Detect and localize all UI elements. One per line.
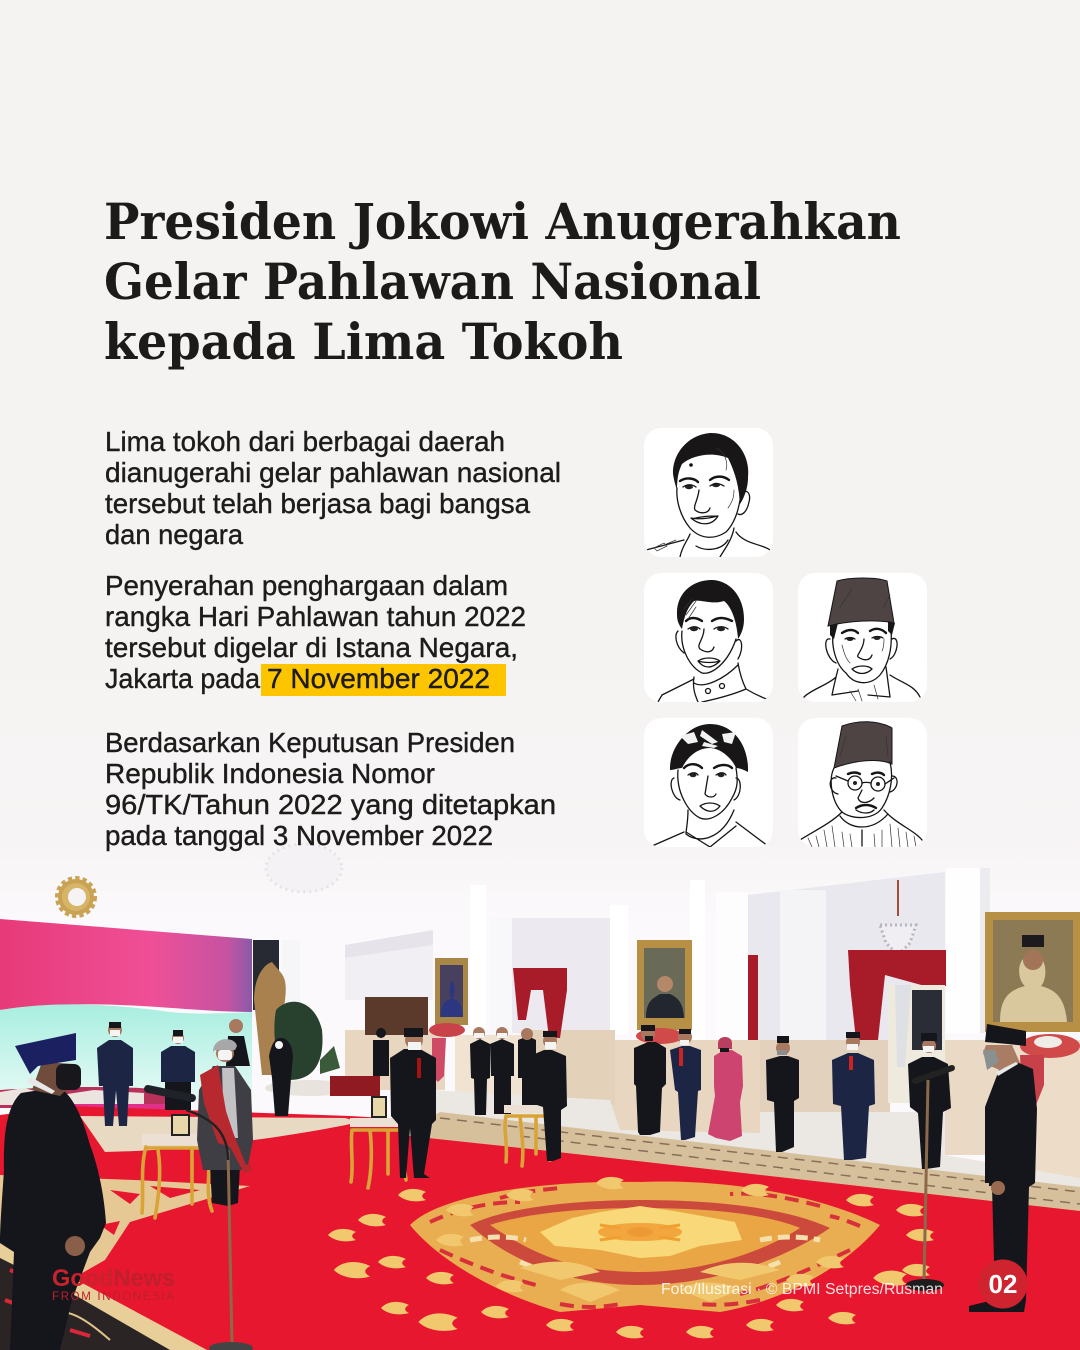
minister xyxy=(670,1029,701,1140)
window xyxy=(888,985,945,1103)
official in foreground right xyxy=(969,1024,1037,1312)
microphone stand left xyxy=(148,1089,253,1350)
recipient: man right xyxy=(530,1031,567,1161)
title: kepada Lima Tokoh xyxy=(104,312,623,371)
page number badge xyxy=(978,1260,1028,1308)
paragraph 1: dianugerahi gelar pahlawan nasional xyxy=(105,457,561,488)
wainscot marble base xyxy=(345,1030,1080,1180)
ornament: gold sun xyxy=(58,879,94,915)
portrait 5 xyxy=(798,718,927,847)
carpet xyxy=(0,1106,1080,1350)
table center xyxy=(350,1097,408,1188)
photo credit: Foto/Ilustrasi · © BPMI Setpres/Rusman xyxy=(661,1281,943,1298)
paragraph 3: Republik Indonesia Nomor xyxy=(105,758,435,789)
curtains xyxy=(513,950,946,1040)
recipient: woman in red sash xyxy=(197,1039,253,1206)
guest in black hijab xyxy=(269,1038,293,1116)
portrait 1 xyxy=(644,428,773,557)
wooden panel xyxy=(365,997,428,1035)
LED screen xyxy=(0,919,252,1118)
back row left xyxy=(470,1027,490,1115)
portrait 4 xyxy=(644,718,773,847)
woman in pink xyxy=(708,1037,743,1141)
paragraph 3 xyxy=(105,727,556,851)
background guests xyxy=(97,1019,951,1169)
title: Gelar Pahlawan Nasional xyxy=(104,252,761,311)
official in foreground left xyxy=(0,1033,106,1350)
paragraph 2 with highlighted date: 7 November 2022 xyxy=(267,663,490,694)
title: Presiden Jokowi Anugerahkan xyxy=(104,192,901,251)
photographer xyxy=(373,1028,389,1076)
portrait 3 xyxy=(798,573,927,702)
plants and flowers xyxy=(254,962,1080,1105)
paragraph 2 with highlighted date: Jakarta pada xyxy=(105,663,260,694)
paragraph 3: 96/TK/Tahun 2022 yang ditetapkan xyxy=(105,789,556,820)
table right xyxy=(504,1105,554,1166)
recipient: man center xyxy=(390,1028,436,1178)
paragraph 2 with highlighted date: Penyerahan penghargaan dalam xyxy=(105,570,508,601)
guest on screen left xyxy=(97,1022,133,1126)
microphone stand right xyxy=(906,1068,952,1291)
gold tables xyxy=(142,1097,554,1218)
minister navy suit xyxy=(832,1032,875,1160)
paragraph 3: Berdasarkan Keputusan Presiden xyxy=(105,727,515,758)
paragraph 2 with highlighted date: rangka Hari Pahlawan tahun 2022 xyxy=(105,601,526,632)
table left xyxy=(142,1115,212,1218)
photo: ceremony at Istana Negara xyxy=(0,844,1080,1350)
guest on screen middle xyxy=(161,1030,195,1110)
paragraph 2 with highlighted date: tersebut digelar di Istana Negara, xyxy=(105,632,518,663)
guest grey hair xyxy=(226,1019,250,1066)
paragraph 1: dan negara xyxy=(105,519,243,550)
paragraph 1 xyxy=(105,426,561,550)
carpet medallion xyxy=(328,1177,934,1338)
portrait 2 xyxy=(644,573,773,702)
marble floor xyxy=(430,1090,1080,1195)
paragraph 3: pada tanggal 3 November 2022 xyxy=(105,820,493,851)
title xyxy=(104,192,901,371)
hall walls and columns xyxy=(253,868,990,1042)
logo: GoodNews from Indonesia: GoodNews xyxy=(52,1265,175,1292)
police officer xyxy=(634,1025,666,1135)
logo: GoodNews from Indonesia: FROM INDONESIA xyxy=(52,1291,175,1303)
paragraph 2 with highlighted date xyxy=(105,570,526,696)
chandeliers xyxy=(266,844,916,955)
paragraph 1: tersebut telah berjasa bagi bangsa xyxy=(105,488,530,519)
paragraph 1: Lima tokoh dari berbagai daerah xyxy=(105,426,505,457)
minister black suit xyxy=(766,1036,799,1152)
minister near door xyxy=(908,1033,951,1169)
page number badge: 02 xyxy=(989,1269,1017,1299)
framed portraits xyxy=(435,912,1080,1032)
